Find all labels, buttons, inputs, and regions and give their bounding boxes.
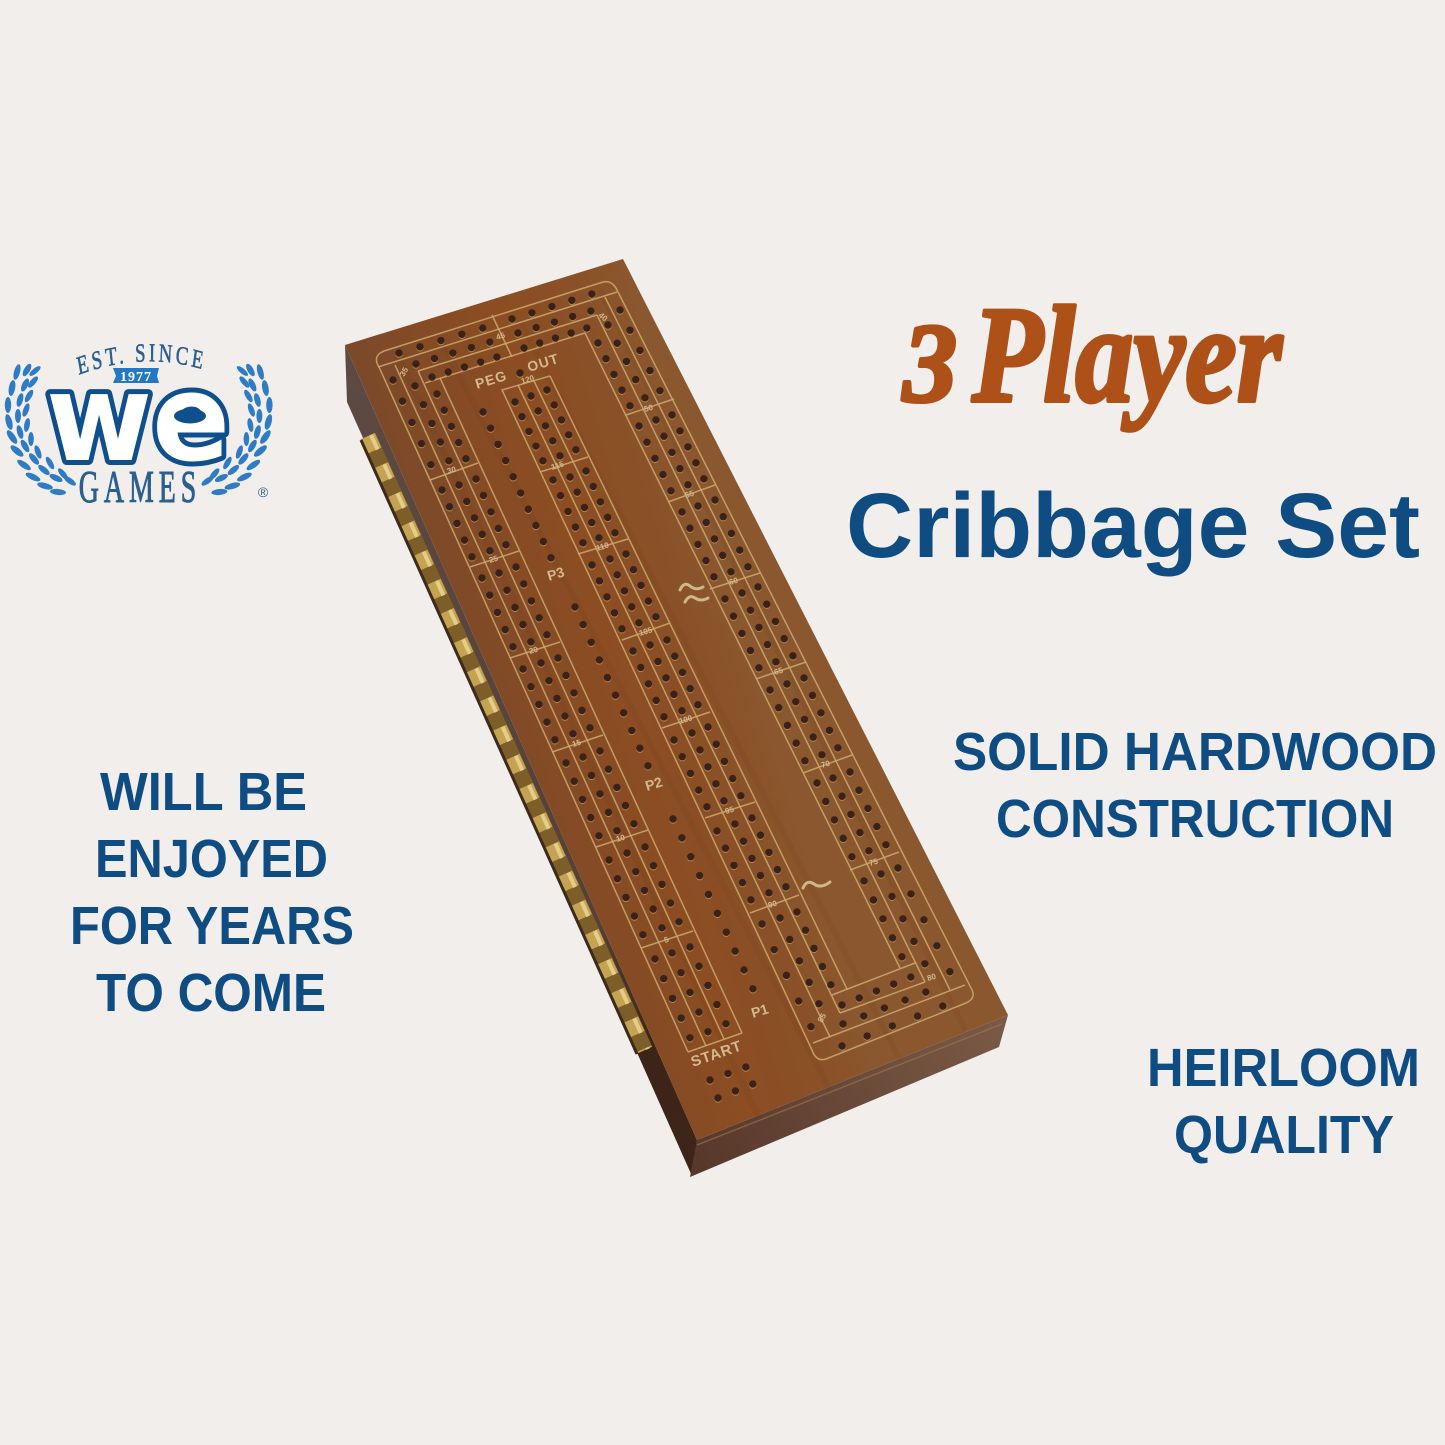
board labels: START <box>689 1037 744 1071</box>
title: 3 Player <box>902 278 1283 431</box>
logo wreath right <box>200 362 274 496</box>
board labels: OUT <box>525 350 561 375</box>
feature text: heirloom quality: QUALITY <box>1174 1105 1394 1165</box>
engraved track lines <box>376 282 973 1060</box>
board labels: 30 <box>446 465 458 476</box>
logo text: games: GAMES <box>79 464 201 513</box>
feature text: solid hardwood construction: CONSTRUCTION <box>996 789 1394 849</box>
board labels: PEG <box>473 367 509 392</box>
logo wreath left <box>4 362 77 496</box>
feature text: solid hardwood construction <box>953 722 1437 849</box>
hinge knuckles <box>368 436 645 1050</box>
board labels: 60 <box>728 576 740 587</box>
cribbage board <box>345 259 1008 1177</box>
brass hinge <box>361 435 648 1054</box>
board labels: 10 <box>615 833 627 844</box>
title numeral: 3 <box>902 302 957 426</box>
board labels: 95 <box>724 805 736 816</box>
board labels: P2 <box>643 773 664 794</box>
hinge base <box>368 436 645 1050</box>
board front side <box>690 1015 1008 1177</box>
board labels: 40 <box>597 311 610 324</box>
board labels: P1 <box>749 1000 770 1021</box>
subtitle: Cribbage Set: Cribbage Set <box>846 475 1420 577</box>
logo banner 1977 <box>113 368 159 385</box>
logo registered mark: ® <box>258 484 269 500</box>
board labels: 50 <box>643 403 655 414</box>
wood grain <box>400 290 965 1120</box>
feature text: will be enjoyed: ENJOYED <box>95 829 328 889</box>
board left side <box>345 345 697 1176</box>
title word: Player <box>971 278 1283 431</box>
board labels: 5 <box>663 935 670 945</box>
board labels: 105 <box>638 625 654 638</box>
board labels: 20 <box>528 645 540 656</box>
board labels: 15 <box>571 738 583 749</box>
feature text: heirloom quality <box>1147 1038 1420 1165</box>
board top face <box>345 259 1008 1140</box>
engraved squiggle marks <box>680 584 830 888</box>
board labels: 35 <box>398 365 410 378</box>
peg holes <box>393 294 950 1098</box>
board labels: 120 <box>520 373 536 386</box>
hinge shadow <box>361 440 637 1054</box>
logo text: est since: EST. SINCE <box>76 344 203 375</box>
feature text: heirloom quality: HEIRLOOM <box>1147 1038 1420 1098</box>
board lid seam <box>697 1024 1002 1145</box>
feature text: will be enjoyed: WILL BE <box>100 762 307 822</box>
board labels: 70 <box>820 759 832 770</box>
board labels: 75 <box>868 857 880 868</box>
board labels: 80 <box>926 972 938 983</box>
logo: WE Games <box>4 344 273 513</box>
board labels: 25 <box>488 554 500 565</box>
logo wordmark: we: we <box>46 350 230 489</box>
board labels: 90 <box>767 899 779 910</box>
hinge highlight <box>371 435 648 1049</box>
feature text: will be enjoyed: TO COME <box>96 963 326 1023</box>
board labels: 100 <box>678 713 694 726</box>
board labels: 65 <box>773 666 785 677</box>
board labels: 110 <box>595 540 610 553</box>
board labels <box>398 311 938 1071</box>
board labels: 115 <box>550 459 565 472</box>
logo e counter <box>174 408 206 424</box>
board labels: 45 <box>495 331 507 342</box>
board labels: 55 <box>684 489 696 500</box>
board labels: 85 <box>816 1011 828 1024</box>
feature text: will be enjoyed <box>70 762 354 1023</box>
logo banner 1977: 1977 <box>120 370 152 385</box>
feature text: will be enjoyed: FOR YEARS <box>70 896 354 956</box>
board labels: P3 <box>545 563 566 584</box>
